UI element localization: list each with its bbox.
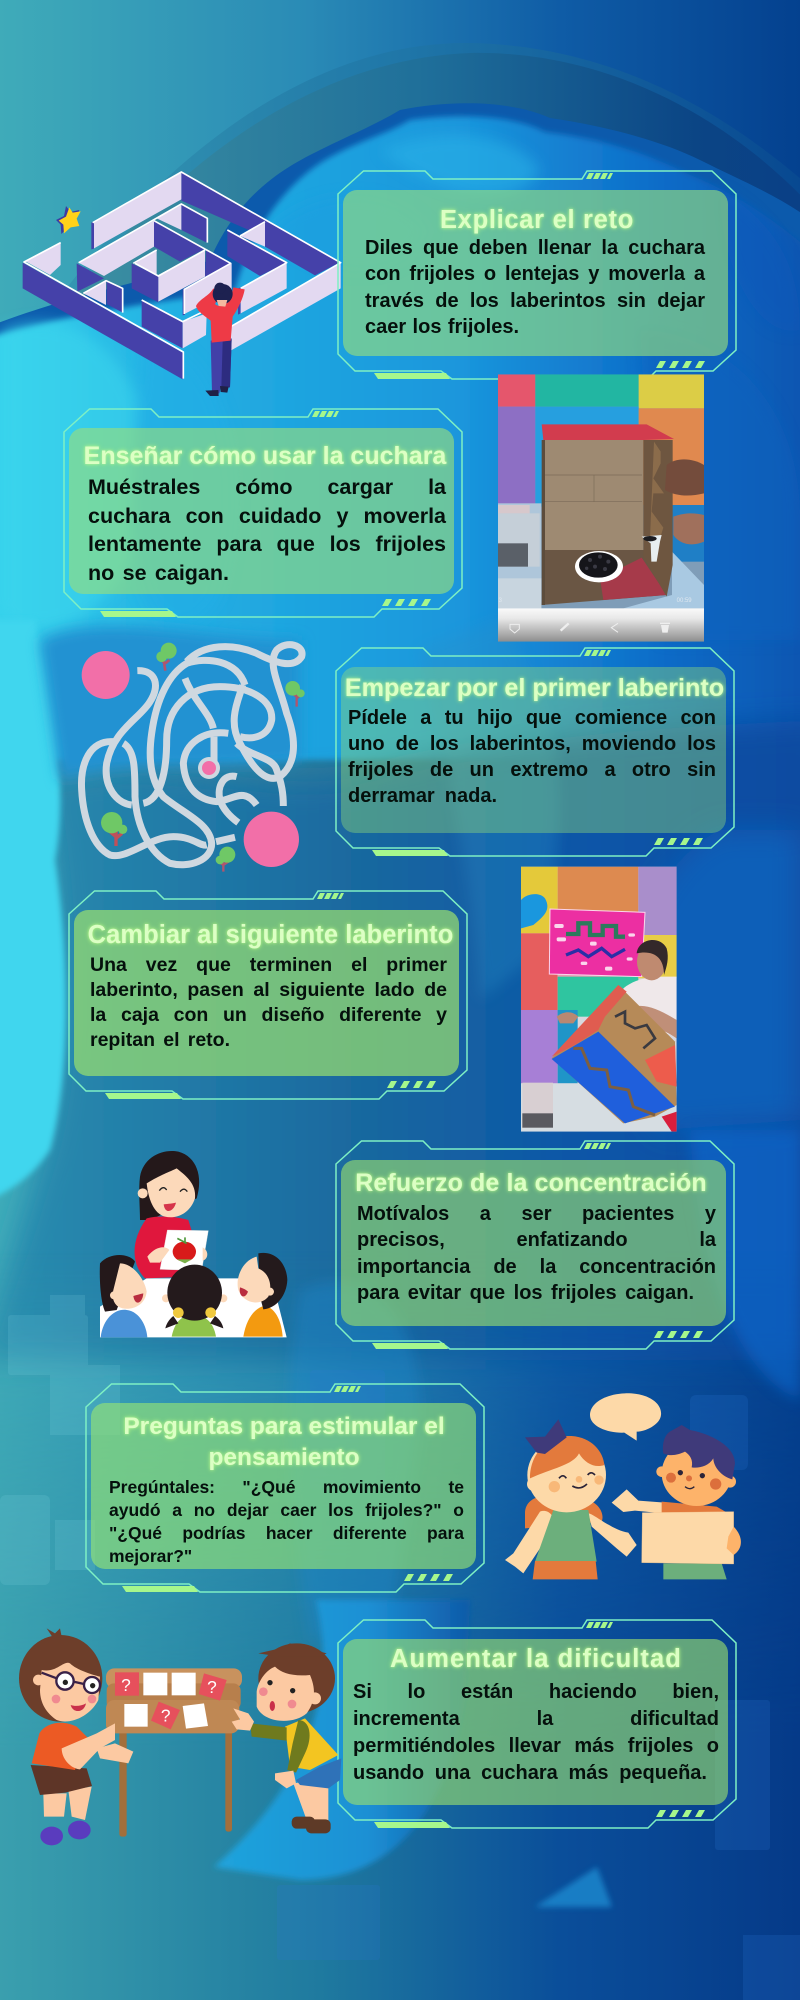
text block: no se caigan.	[88, 560, 229, 584]
photo: cardboard maze box	[498, 374, 704, 642]
panel: Enseñar cómo usar la cuchara	[63, 408, 463, 618]
text block	[109, 1476, 464, 1566]
text block: incrementa la dificultad	[353, 1708, 719, 1730]
panel: Preguntas para estimular el pensamiento	[85, 1383, 485, 1593]
icon: middle point	[198, 757, 220, 779]
photo: woman holding maze box	[521, 866, 677, 1132]
icon: star	[56, 206, 81, 234]
illustration: maze with confused man	[22, 171, 342, 396]
table	[100, 1278, 287, 1337]
text block: Motívalos a ser pacientes y	[357, 1203, 716, 1225]
text block	[88, 475, 446, 584]
text block: Pídele a tu hijo que comience con	[348, 707, 716, 729]
icon: end circle	[244, 812, 299, 867]
text block: caer los frijoles.	[365, 316, 519, 338]
text block: "¿Qué podrías hacer diferente para	[109, 1523, 464, 1543]
text block: derramar nada.	[348, 785, 497, 807]
child pointing	[232, 1643, 341, 1833]
panel fill	[341, 1160, 726, 1326]
child with glasses	[19, 1628, 133, 1845]
man: hands on head	[196, 283, 245, 396]
illustration: teacher showing card to children	[100, 1151, 288, 1338]
text block: permitiéndoles llevar más frijoles o	[353, 1734, 719, 1756]
text block: mejorar?"	[109, 1546, 192, 1566]
panel fill	[74, 910, 459, 1076]
panel frame	[337, 170, 737, 380]
heading: Refuerzo de la concentración	[355, 1169, 707, 1197]
board: ?	[161, 1706, 170, 1726]
text block: uno de los laberintos, moviendo los	[348, 733, 716, 755]
text block	[353, 1680, 719, 1784]
heading: line two: pensamiento	[208, 1444, 360, 1471]
heading: Cambiar al siguiente laberinto	[88, 921, 453, 949]
text block: frijoles de un extremo a otro sin	[348, 759, 716, 781]
panel frame	[68, 890, 468, 1100]
text block: Una vez que terminen el primer	[90, 954, 447, 976]
heading: Empezar por el primer laberinto	[345, 674, 724, 702]
text block: laberinto, pasen al siguiente lado de	[90, 979, 447, 1001]
text block: Diles que deben llenar la cuchara	[365, 237, 705, 259]
text block: través de los laberintos sin dejar	[365, 290, 705, 312]
text block: cuchara con cuidado y moverla	[88, 504, 446, 528]
panel frame	[335, 647, 735, 857]
panel: Aumentar la dificultad	[337, 1619, 737, 1829]
panel fill	[341, 667, 726, 833]
icons: trees	[101, 643, 305, 872]
panel fill	[91, 1403, 476, 1569]
board	[106, 1668, 242, 1837]
teacher	[135, 1151, 208, 1278]
text block: Si lo están haciendo bien,	[353, 1680, 719, 1702]
panel frame	[337, 1619, 737, 1829]
panel: Explicar el reto	[337, 170, 737, 380]
panel fill	[69, 428, 454, 594]
text block: lentamente para que los frijoles	[88, 532, 446, 556]
text block: precisos, enfatizando la	[357, 1229, 716, 1251]
panel frame	[335, 1140, 735, 1350]
panel: Cambiar al siguiente laberinto	[68, 890, 468, 1100]
text block: Muéstrales cómo cargar la	[88, 475, 446, 499]
child right	[238, 1253, 287, 1337]
text block: Pregúntales: "¿Qué movimiento te	[109, 1476, 464, 1496]
heading: Aumentar la dificultad	[390, 1645, 682, 1673]
text block: repitan el reto.	[90, 1029, 230, 1051]
icon: start circle	[82, 651, 130, 699]
text block: importancia de la concentración	[357, 1256, 716, 1278]
text block	[90, 954, 447, 1051]
panel frame	[63, 408, 463, 618]
photo: cardboard maze box: 00:59	[677, 598, 692, 604]
text block: usando una cuchara más pequeña.	[353, 1762, 707, 1784]
boy	[612, 1425, 741, 1579]
photo: cardboard maze box: 3	[499, 598, 503, 604]
board: ?	[121, 1675, 131, 1695]
heading: line one: Preguntas para estimular el	[123, 1413, 445, 1440]
text block: con frijoles o lentejas y moverla a	[365, 263, 705, 285]
girl	[505, 1419, 637, 1579]
text block: ayudó a no dejar caer los frijoles?" o	[109, 1500, 464, 1520]
text block	[348, 707, 716, 807]
heading: Explicar el reto	[440, 206, 634, 234]
panel fill	[343, 190, 728, 356]
illustration: winding path maze	[78, 641, 306, 872]
panel: Refuerzo de la concentración	[335, 1140, 735, 1350]
text block: para evitar que los frijoles caigan.	[357, 1282, 694, 1304]
child middle	[162, 1265, 227, 1337]
speech bubble	[590, 1393, 661, 1441]
text block	[357, 1203, 716, 1304]
text block: la caja con un diseño diferente y	[90, 1004, 447, 1026]
heading: Enseñar cómo usar la cuchara	[84, 442, 446, 470]
board: ?	[207, 1677, 217, 1697]
text block	[365, 237, 706, 338]
panel fill	[343, 1639, 728, 1805]
maze walls	[23, 172, 341, 379]
panel: Empezar por el primer laberinto	[335, 647, 735, 857]
panel frame	[85, 1383, 485, 1593]
child left	[100, 1255, 147, 1337]
